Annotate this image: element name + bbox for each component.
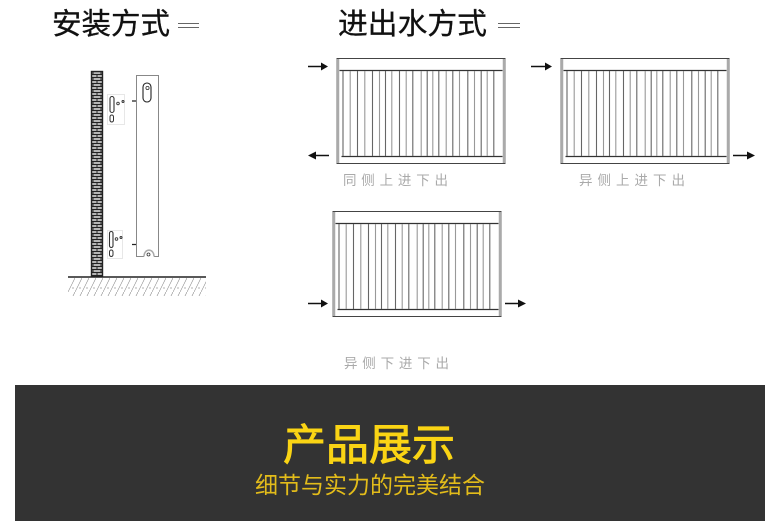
banner: product showcase: [15, 385, 765, 521]
radiator: [337, 58, 505, 164]
diagram: same-side top in, bottom out: [308, 58, 505, 188]
arrow in: [308, 62, 328, 70]
arrow out: [308, 152, 329, 160]
diagram: opposite-side bottom in, bottom out: [308, 212, 526, 371]
radiator: [333, 212, 501, 316]
diagram: wall mounting side view: [68, 72, 206, 296]
brick wall: [92, 72, 102, 276]
heading: water inlet and outlet method: 进出水方式: [338, 8, 487, 41]
arrow in: [531, 62, 552, 70]
arrow out: [733, 152, 755, 160]
upper wall bracket: [108, 94, 124, 124]
banner subtitle: 细节与实力的完美结合: [255, 472, 485, 498]
radiator: [561, 58, 729, 164]
banner title: 产品展示: [283, 422, 455, 470]
caption: 同侧上进下出: [343, 173, 453, 188]
arrow out: [505, 300, 526, 308]
heading: installation method: 安装方式: [52, 8, 170, 41]
floor with hatching: [68, 277, 206, 296]
radiator side panel: [132, 76, 159, 256]
diagram: opposite-side top in, bottom out: [531, 58, 755, 188]
lower wall bracket: [108, 230, 122, 258]
caption: 异侧上进下出: [579, 173, 690, 188]
caption: 异侧下进下出: [344, 356, 454, 371]
arrow in: [308, 300, 328, 308]
